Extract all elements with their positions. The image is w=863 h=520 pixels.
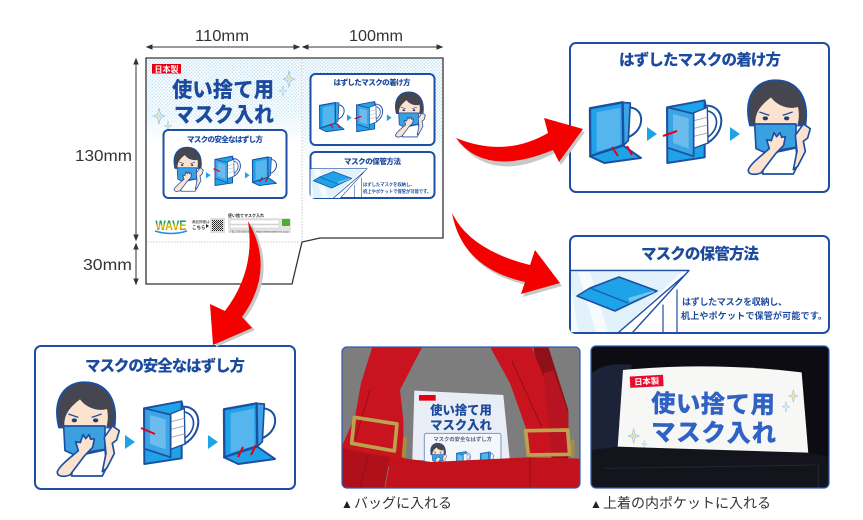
QR code: 商品詳細は [192, 219, 210, 224]
storage text: はずしたマスクを収納し、 [682, 296, 787, 307]
card in bag: マスク入れ [430, 418, 492, 432]
30mm height [83, 244, 138, 284]
panel: storage [570, 236, 829, 333]
110mm width: 110mm [195, 28, 249, 45]
photo: in jacket pocket [591, 346, 830, 489]
mini panel: storage: 机上やポケットで保管が可能です。 [363, 188, 431, 195]
arrow: step 2 [730, 127, 740, 141]
photo: in a bag [342, 347, 580, 489]
130mm height: 130mm [75, 148, 132, 165]
storage text [681, 296, 827, 321]
card in bag [412, 391, 510, 463]
caption: bag: ▲ [341, 497, 353, 511]
panel heading: マスクの保管方法 [641, 244, 759, 263]
arrow: step 2 [208, 435, 218, 449]
panel heading: はずしたマスクの着け方 [619, 50, 781, 69]
icon: folded mask [224, 403, 275, 464]
caption: bag: バッグに入れる [354, 495, 452, 511]
mini panel: how to re-wear: はずしたマスクの着け方 [334, 77, 411, 87]
product card [146, 58, 443, 284]
130mm height [75, 59, 138, 240]
arrow: to storage panel [452, 213, 562, 297]
QR code [192, 218, 225, 233]
mini panel: storage: マスクの保管方法 [344, 156, 402, 166]
sparkles [153, 71, 295, 131]
QR code: こちら [192, 224, 206, 231]
mini panel: storage [310, 152, 434, 198]
made in Japan badge: 日本製 [154, 64, 178, 74]
caption: jacket: 上着の内ポケットに入れる [603, 495, 771, 511]
badge: 日本製 [634, 376, 660, 387]
icon: person wearing mask [748, 80, 810, 174]
panel heading: マスクの安全なはずし方 [85, 356, 245, 375]
mini panel: how to re-wear [310, 74, 434, 145]
icon: open mask [663, 100, 721, 163]
icon: folded mask [590, 102, 641, 163]
bag pocket and buckles [342, 360, 580, 489]
mini panel: safe removal [164, 130, 286, 198]
card in bag: マスクの安全なはずし方 [433, 435, 493, 443]
storage text: 机上やポケットで保管が可能です。 [681, 310, 827, 321]
110mm width [147, 28, 299, 49]
card title: 使い捨て用 [172, 78, 274, 102]
badge [630, 375, 664, 388]
product info box: 使い捨てマスク入れ [228, 212, 264, 218]
100mm width [303, 28, 442, 49]
mini panel: safe removal: マスクの安全なはずし方 [187, 134, 264, 144]
arrow: to re-wear panel [456, 118, 585, 166]
WAVE logo: WAVE [156, 217, 186, 233]
card outline [146, 58, 443, 284]
card title: マスク入れ [174, 104, 274, 127]
100mm width: 100mm [349, 28, 403, 45]
arrow: step 1 [647, 127, 657, 141]
card in bag: 使い捨て用 [430, 402, 492, 417]
caption: jacket: ▲ [590, 497, 602, 511]
photo: in jacket pocket: 使い捨て用 [651, 390, 775, 419]
arrow: step 1 [125, 435, 135, 449]
photo: in jacket pocket: マスク入れ [651, 419, 777, 448]
mini panel: storage: はずしたマスクを収納し、 [363, 181, 415, 188]
arrow: to safe removal panel [210, 221, 264, 347]
panel: how to re-wear removed mask [570, 43, 829, 192]
icon: person wearing mask [57, 382, 119, 476]
dimension labels [75, 28, 442, 284]
panel: safe removal [35, 346, 295, 489]
icon: open mask [141, 401, 198, 464]
card title [172, 78, 274, 127]
product info box [228, 212, 291, 234]
30mm height: 30mm [83, 257, 132, 274]
product info box: TEL 075-000-0000 https://www.wave-inc.co.jp [230, 230, 289, 234]
desk illustration [570, 270, 689, 332]
